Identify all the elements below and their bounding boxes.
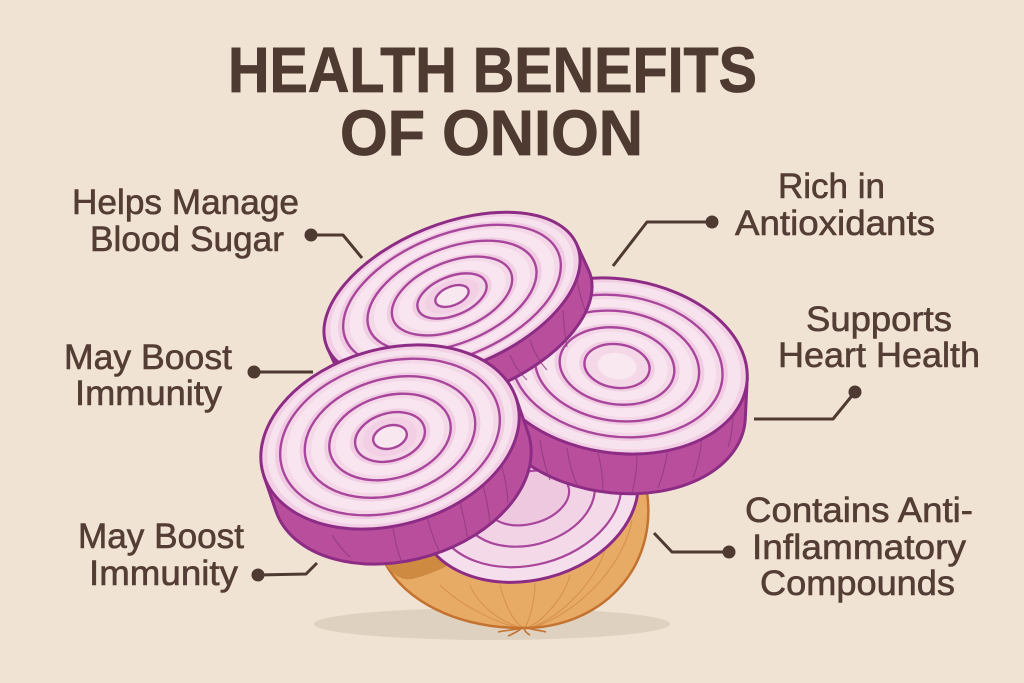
label: Supports Heart Health: Heart Health	[778, 336, 980, 375]
label: May Boost Immunity upper	[64, 338, 313, 413]
title: OF ONION	[340, 97, 643, 169]
roots	[498, 627, 546, 636]
title: HEALTH BENEFITS	[228, 34, 757, 106]
label: Contains Anti-Inflammatory Compounds	[654, 491, 973, 603]
ground shadow	[314, 608, 670, 640]
label: Helps Manage Blood Sugar: Helps Manage	[72, 183, 299, 222]
label: Helps Manage Blood Sugar	[72, 183, 362, 259]
title	[228, 34, 757, 169]
label: Helps Manage Blood Sugar: Blood Sugar	[90, 220, 284, 259]
label: Rich in Antioxidants: Rich in	[778, 167, 885, 206]
onion illustration	[239, 179, 759, 640]
label: May Boost Immunity lower	[78, 517, 317, 593]
label: Contains Anti-Inflammatory Compounds: Compounds	[760, 564, 955, 603]
onion bulb half	[385, 470, 648, 636]
left slice	[239, 316, 541, 564]
label: Supports Heart Health	[754, 300, 980, 419]
label: May Boost Immunity upper: May Boost	[64, 338, 232, 377]
label: Contains Anti-Inflammatory Compounds: Contains Anti-	[745, 491, 973, 530]
label: Rich in Antioxidants	[613, 167, 935, 266]
right slice	[475, 262, 759, 494]
label: Supports Heart Health: Supports	[806, 300, 952, 339]
label: Rich in Antioxidants: Antioxidants	[735, 204, 935, 243]
half slice face	[399, 390, 657, 606]
label: May Boost Immunity upper: Immunity	[75, 374, 223, 413]
label: May Boost Immunity lower: Immunity	[89, 554, 239, 593]
label: May Boost Immunity lower: May Boost	[78, 517, 244, 556]
top slice	[300, 179, 604, 413]
label: Contains Anti-Inflammatory Compounds: Inflammatory	[752, 528, 967, 567]
